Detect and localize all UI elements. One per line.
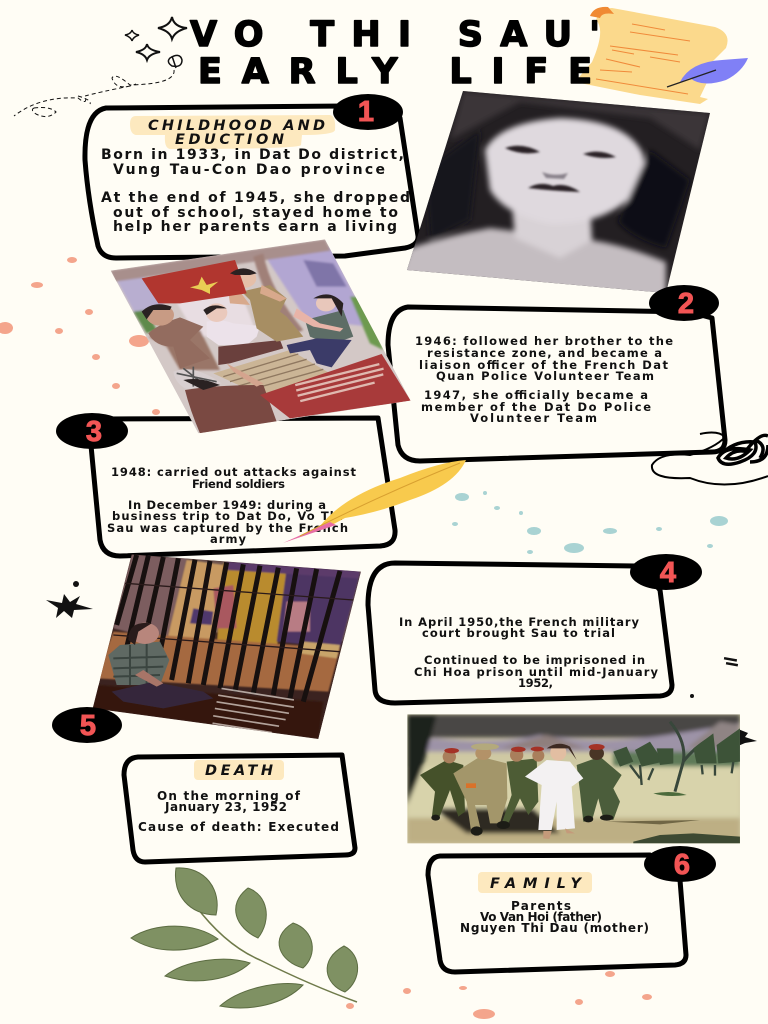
badge: number 2: 2 bbox=[678, 288, 694, 320]
image: portrait photo bbox=[407, 91, 710, 292]
icon: black scribble bbox=[652, 433, 768, 485]
bamboo bed bbox=[213, 350, 330, 395]
icon: sparkles and dashed trail bbox=[14, 17, 187, 117]
heading: family bbox=[478, 872, 592, 893]
text: April 1950 trial bbox=[399, 615, 640, 640]
text: birth: Born in 1933, in Dat Do district, bbox=[101, 147, 404, 163]
badge: number 5 bbox=[52, 707, 122, 743]
text: Chi Hoa prison: 1952, bbox=[518, 676, 553, 690]
heading: death bbox=[194, 760, 284, 780]
text: date of death bbox=[157, 789, 301, 814]
icon: paper scroll with quill bbox=[575, 7, 748, 104]
soldiers bbox=[420, 760, 465, 820]
text: 1946: 1946: followed her brother to the bbox=[415, 334, 673, 348]
text: dropped out of school: out of school, stayed home to bbox=[113, 205, 398, 221]
man left bbox=[148, 317, 210, 368]
text: April 1950 trial: In April 1950,the French military bbox=[399, 615, 640, 629]
text: 1947 bbox=[421, 388, 651, 425]
badge: number 2 bbox=[649, 285, 719, 321]
panel: death bbox=[124, 755, 355, 862]
badge: number 4 bbox=[630, 554, 702, 590]
badge: number 4: 4 bbox=[660, 557, 676, 589]
icon: yellow feather bbox=[283, 460, 466, 543]
text: December 1949 capture: In December 1949: during a bbox=[128, 498, 326, 512]
text: Chi Hoa prison: Continued to be imprisoned in bbox=[424, 653, 645, 667]
text: 1948 attacks: 1948: carried out attacks against bbox=[111, 465, 356, 479]
image: prison painting bbox=[93, 554, 361, 739]
woman in white bbox=[525, 760, 583, 830]
text: date of death: On the morning of bbox=[157, 789, 301, 803]
text: parents: Parents bbox=[511, 899, 571, 913]
image: execution march painting bbox=[407, 714, 740, 843]
panel: childhood and education bbox=[85, 106, 418, 258]
text: parents bbox=[460, 899, 649, 935]
text: parents: Nguyen Thi Dau (mother) bbox=[460, 921, 649, 935]
decorative pink dots bbox=[0, 257, 652, 1019]
text: April 1950 trial: court brought Sau to trial bbox=[422, 626, 615, 640]
heading: childhood and eduction: EDUCTION bbox=[175, 132, 284, 148]
badge: number 3: 3 bbox=[86, 416, 102, 448]
heading: childhood and eduction bbox=[130, 115, 335, 149]
text: birth: Vung Tau-Con Dao province bbox=[113, 162, 385, 178]
panel: attacks and capture bbox=[90, 418, 395, 556]
heading: death: DEATH bbox=[205, 763, 273, 779]
decorative blue dots bbox=[452, 491, 728, 554]
text: 1946 bbox=[415, 334, 673, 383]
text: 1946: liaison officer of the French Dat bbox=[419, 358, 668, 372]
heading: family: FAMILY bbox=[490, 876, 582, 892]
text: 1948 attacks bbox=[111, 465, 356, 491]
text: dropped out of school: help her parents earn a living bbox=[113, 219, 397, 235]
badge: number 1 bbox=[333, 94, 403, 130]
text: parents: Vo Van Hoi (father) bbox=[480, 910, 602, 924]
text: 1947: Volunteer Team bbox=[470, 411, 597, 425]
boy standing bbox=[242, 285, 303, 342]
text: 1946: resistance zone, and became a bbox=[427, 346, 662, 360]
title bbox=[190, 15, 600, 92]
badge: number 1: 1 bbox=[358, 96, 374, 128]
lower figure bbox=[185, 385, 277, 433]
icon: black star bbox=[46, 581, 93, 618]
badge: number 6 bbox=[644, 846, 716, 882]
text: dropped out of school bbox=[101, 190, 410, 235]
small black marks bbox=[690, 657, 757, 746]
text: birth bbox=[101, 147, 404, 178]
text: December 1949 capture: Sau was captured by the French bbox=[107, 521, 348, 535]
badge: number 6: 6 bbox=[674, 849, 690, 881]
text: Chi Hoa prison bbox=[414, 653, 658, 690]
woman right bbox=[306, 310, 354, 340]
image: children painting bbox=[111, 239, 411, 433]
panel: resistance zone bbox=[388, 307, 725, 461]
heading: childhood and eduction: CHILDHOOD AND bbox=[148, 118, 325, 134]
text: December 1949 capture: business trip to Dat Do, Vo Thi bbox=[112, 509, 343, 523]
text: 1946: Quan Police Volunteer Team bbox=[436, 369, 654, 383]
text: 1947: member of the Dat Do Police bbox=[421, 400, 651, 414]
text: December 1949 capture: army bbox=[210, 532, 246, 546]
icon: leaf branch bbox=[131, 868, 358, 1008]
text: December 1949 capture bbox=[107, 498, 348, 546]
text: 1948 attacks: Friend soldiers bbox=[192, 477, 285, 491]
badge: number 3 bbox=[56, 413, 128, 449]
trees bbox=[630, 722, 733, 792]
badge: number 5: 5 bbox=[80, 710, 96, 742]
text: 1947: 1947, she officially became a bbox=[424, 388, 648, 402]
title: EARLY LIFE bbox=[198, 52, 592, 92]
title: VO THI SAU' bbox=[190, 15, 600, 55]
text: Chi Hoa prison: Chi Hoa prison until mid-January bbox=[414, 665, 658, 679]
text: dropped out of school: At the end of 1945, she dropped bbox=[101, 190, 410, 206]
panel: trial and imprisonment bbox=[368, 563, 672, 703]
text: cause of death: Cause of death: Executed bbox=[138, 820, 339, 834]
text: date of death: January 23, 1952 bbox=[164, 800, 287, 814]
panel: family bbox=[428, 855, 686, 972]
